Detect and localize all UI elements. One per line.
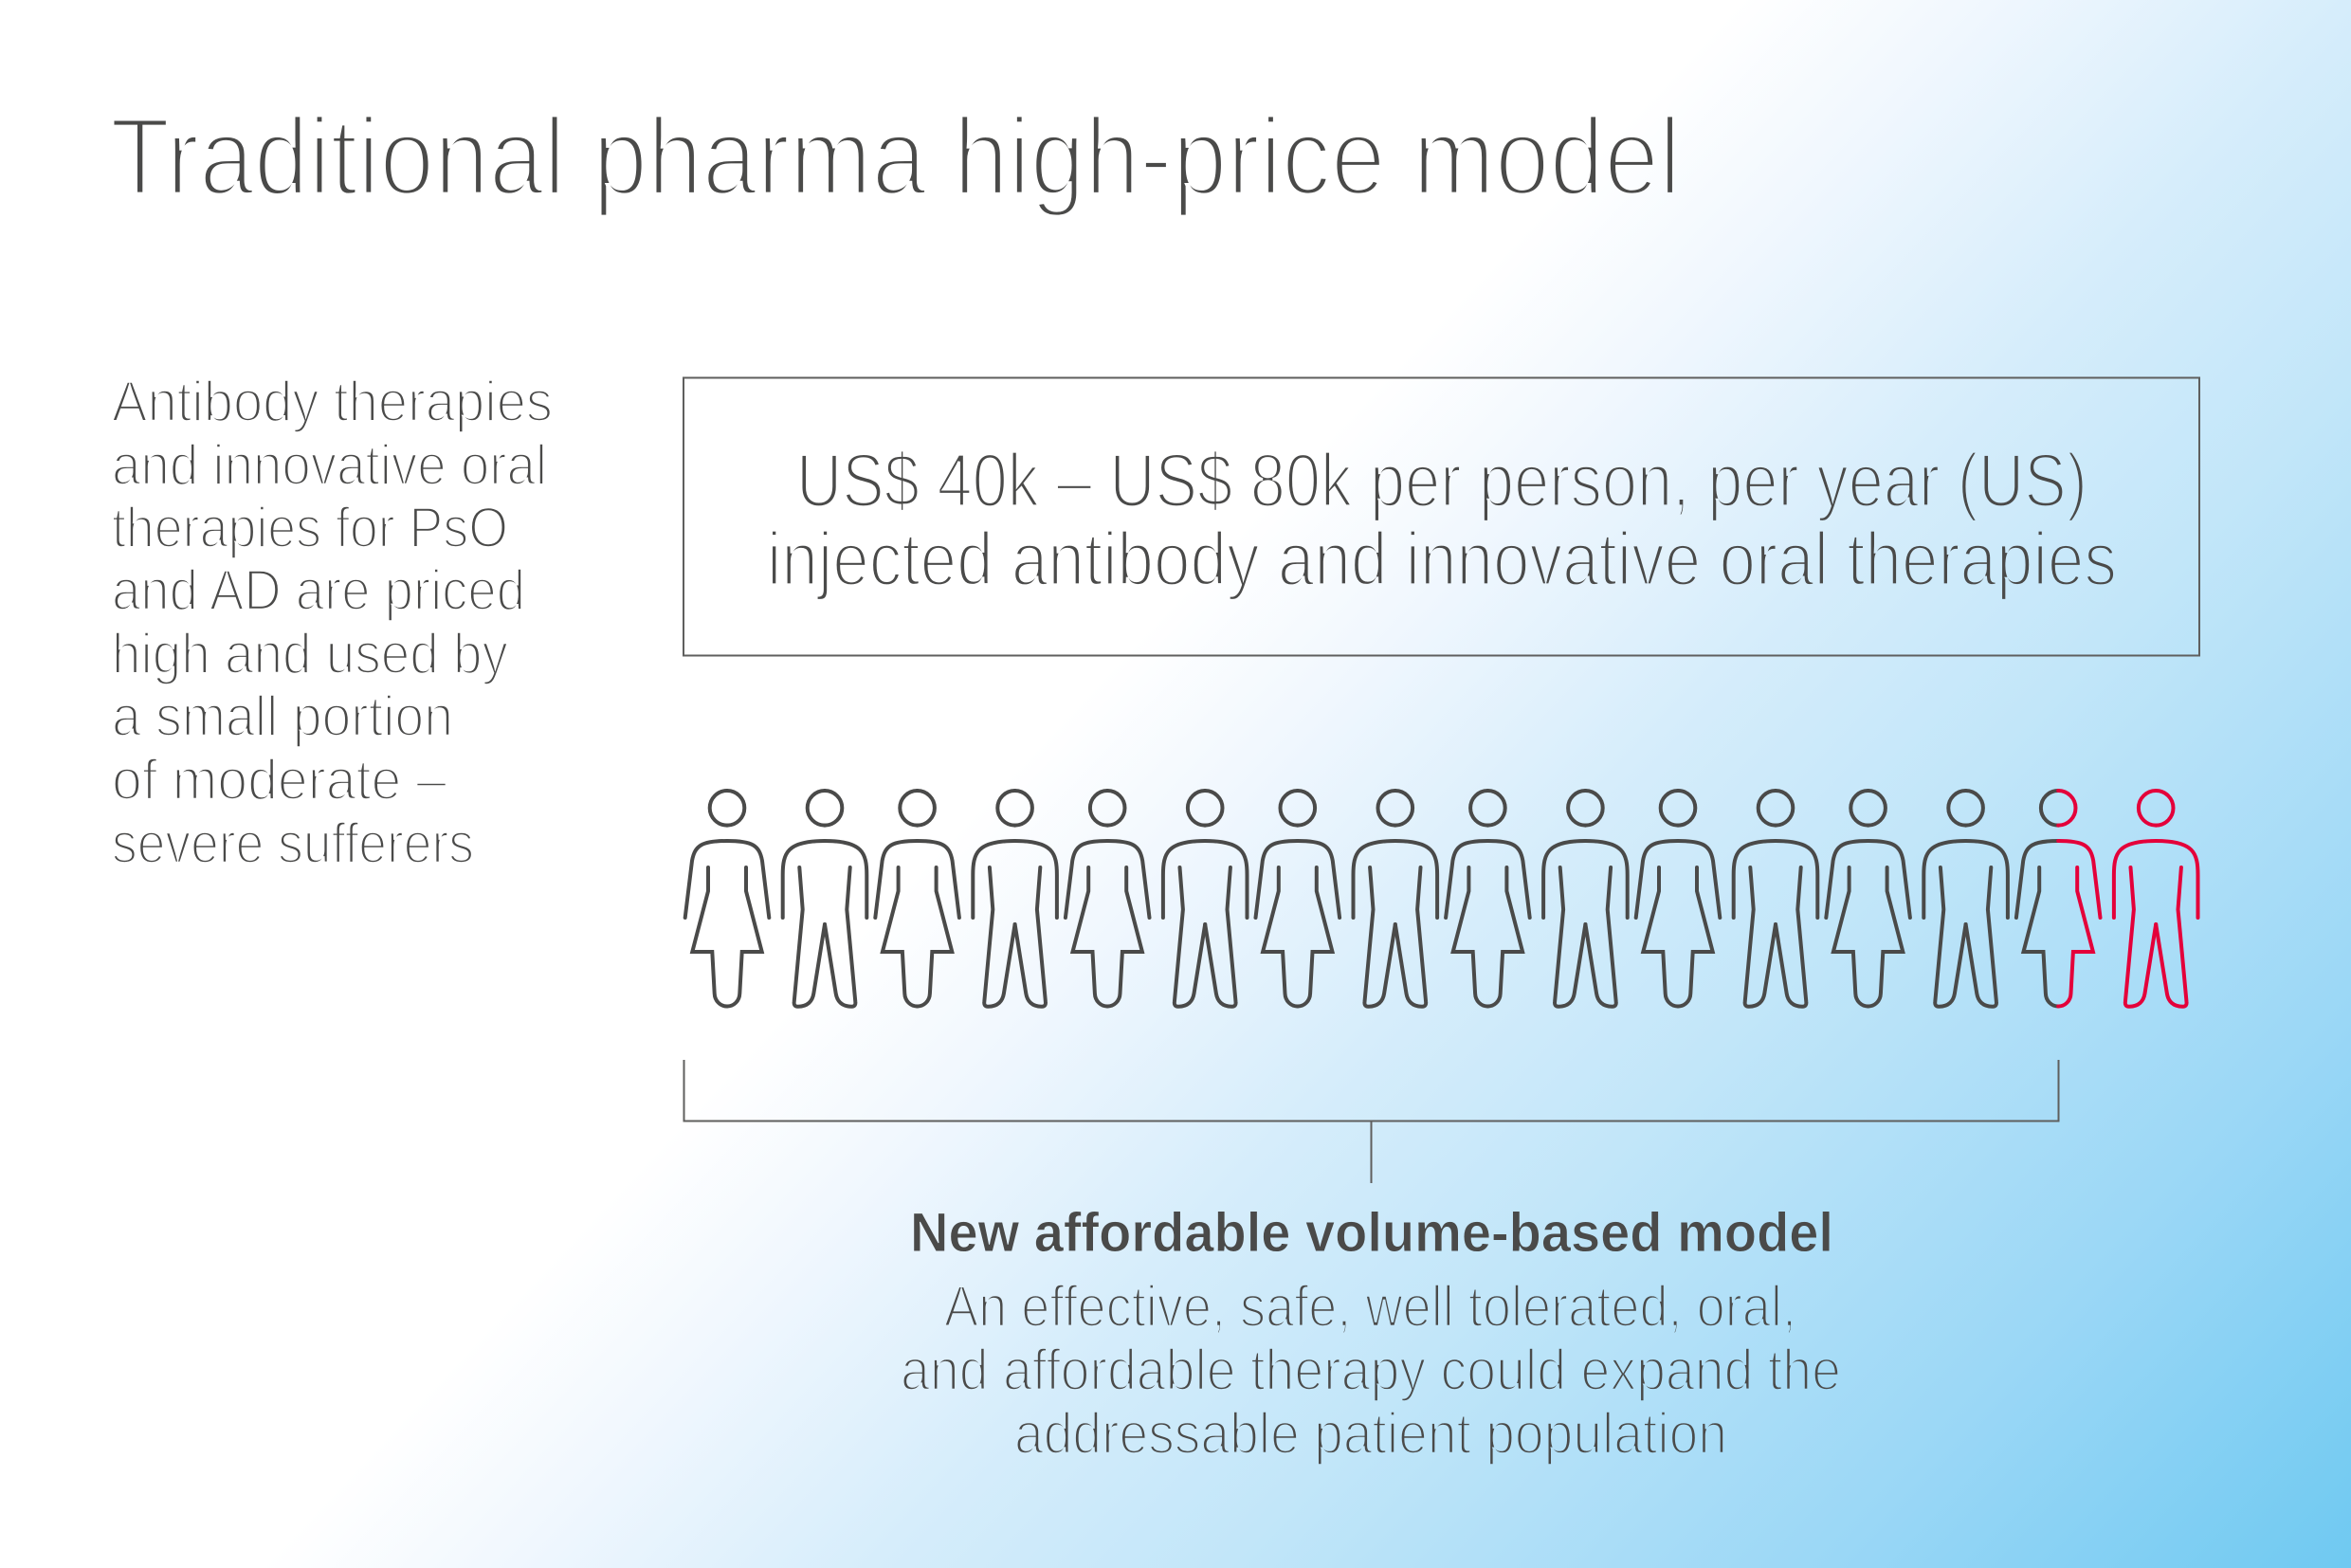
text block: antibody therapies description: and AD are priced xyxy=(112,558,525,622)
price box xyxy=(683,377,2199,656)
text block: antibody therapies description: Antibody therapies xyxy=(112,370,553,433)
icon: woman 3 xyxy=(1066,791,1149,1007)
price text xyxy=(767,438,2117,601)
icon: woman 6 xyxy=(1636,791,1720,1007)
text block: new model description: and affordable therapy could expand the xyxy=(901,1338,1841,1402)
price text: injected antibody and innovative oral therapies xyxy=(767,517,2117,601)
text block: antibody therapies description: severe sufferers xyxy=(112,811,474,875)
text block: new model description: An effective, safe, well tolerated, oral, xyxy=(944,1274,1796,1339)
icon: half-red woman xyxy=(2016,791,2101,1007)
text block: antibody therapies description: of moderate – xyxy=(112,748,447,811)
text block: antibody therapies description xyxy=(112,370,553,875)
icon: man 6 xyxy=(1734,791,1817,1007)
row of 16 patient icons xyxy=(685,791,2198,1007)
text block: new model description: addressable patient population xyxy=(1014,1401,1727,1466)
icon: man 4 xyxy=(1354,791,1437,1007)
icon: woman 4 xyxy=(1255,791,1340,1007)
icon: man 5 xyxy=(1543,791,1628,1007)
title: Traditional pharma high-price model xyxy=(110,95,1681,218)
price text: US$ 40k – US$ 80k per person, per year (US) xyxy=(796,438,2087,522)
bracket xyxy=(684,1060,2059,1183)
icon: woman 7 xyxy=(1826,791,1910,1007)
icon: man 7 xyxy=(1923,791,2008,1007)
text block: new model description xyxy=(901,1274,1841,1466)
icon: man 3 xyxy=(1163,791,1248,1007)
icon: woman 2 xyxy=(875,791,959,1007)
icon: man 2 xyxy=(973,791,1057,1007)
icon: man 1 xyxy=(783,791,866,1007)
text block: antibody therapies description: and innovative oral xyxy=(112,433,547,497)
text block: antibody therapies description: high and used by xyxy=(112,622,508,685)
icon: red man xyxy=(2114,791,2197,1007)
icon: woman 5 xyxy=(1446,791,1530,1007)
heading: new model: New affordable volume-based model xyxy=(910,1202,1833,1264)
text block: antibody therapies description: therapies for PsO xyxy=(112,496,508,559)
text block: antibody therapies description: a small portion xyxy=(112,684,453,748)
icon: woman 1 xyxy=(685,791,769,1007)
